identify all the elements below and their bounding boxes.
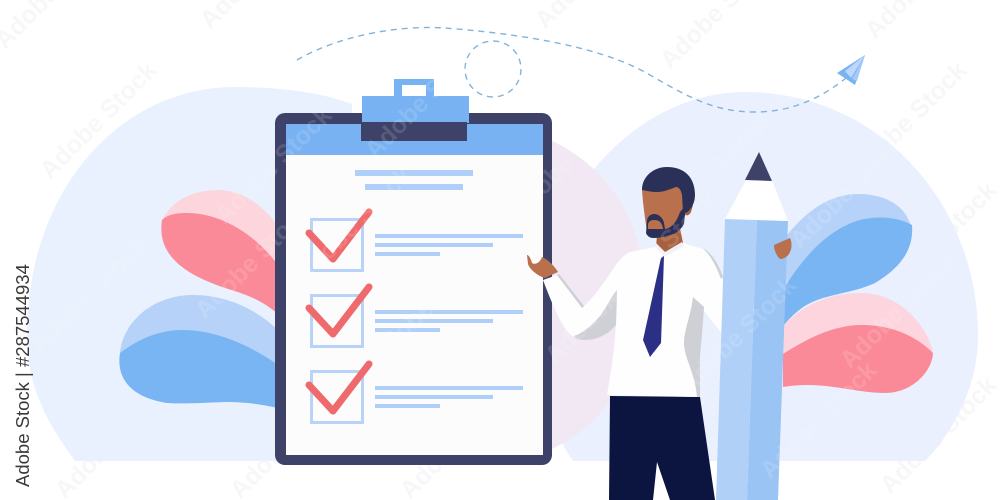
watermark over artwork: Adobe Stock xyxy=(289,161,417,289)
watermark on white background: Adobe Stock xyxy=(34,56,162,184)
checklist item 3 xyxy=(309,364,523,422)
pencil lead xyxy=(745,152,772,181)
pencil xyxy=(716,152,788,500)
plant: right blue leaf xyxy=(783,194,912,326)
watermark over artwork: Adobe Stock xyxy=(834,246,962,374)
watermark on white background: Adobe Stock xyxy=(4,221,132,349)
background shape: left pale blob xyxy=(27,87,352,461)
clip handle xyxy=(394,79,434,97)
watermark over artwork: Adobe Stock xyxy=(674,271,802,399)
dashed flight path xyxy=(297,27,846,112)
plant: right pink leaf xyxy=(783,293,933,393)
pencil body dark side xyxy=(747,220,788,500)
clipboard xyxy=(275,79,552,465)
right hand on pencil xyxy=(774,238,792,259)
watermark on white background: Adobe Stock xyxy=(844,56,972,184)
tie xyxy=(643,256,664,357)
beard and moustache xyxy=(646,205,686,238)
pencil wood tip xyxy=(725,180,788,221)
plant: left pink leaf xyxy=(161,190,278,314)
watermark over artwork: Adobe Stock xyxy=(704,51,832,179)
paper title lines xyxy=(355,170,473,190)
clipboard board xyxy=(275,113,552,465)
plant: left blue leaf xyxy=(119,295,278,408)
dashed loop xyxy=(465,41,521,97)
watermark over artwork: Adobe Stock xyxy=(359,36,487,164)
left hand xyxy=(527,255,558,278)
watermark over artwork: Adobe Stock xyxy=(44,46,172,174)
clip body xyxy=(362,96,469,123)
icon: paper plane xyxy=(837,55,865,85)
watermark over artwork: Adobe Stock xyxy=(24,231,152,359)
background shape: pink circle xyxy=(545,138,645,452)
watermark over artwork: Adobe Stock xyxy=(754,356,882,484)
stock id caption: Adobe Stock | #287544934 xyxy=(12,264,33,487)
man xyxy=(527,167,723,500)
mouth patch xyxy=(648,220,663,229)
watermark on white background: Adobe Stock xyxy=(874,176,1000,304)
clip base xyxy=(361,122,467,141)
watermark over artwork: Adobe Stock xyxy=(209,101,337,229)
watermark on white background: Adobe Stock xyxy=(874,371,1000,499)
watermark over artwork: Adobe Stock xyxy=(539,241,667,369)
pencil body light side xyxy=(716,219,757,500)
paper header band xyxy=(286,124,543,155)
background shape: right pale blob xyxy=(534,92,978,461)
hair xyxy=(642,167,695,213)
collar xyxy=(655,242,684,257)
watermark over artwork: Adobe Stock xyxy=(504,96,632,224)
shirt shadows xyxy=(557,248,723,397)
checklist item 2 xyxy=(309,287,523,346)
shirt xyxy=(543,243,723,397)
paper sheet xyxy=(286,124,543,455)
trousers xyxy=(609,396,715,500)
watermark over artwork: Adobe Stock xyxy=(594,186,722,314)
checklist item 1 xyxy=(309,212,523,270)
neck and ear xyxy=(656,205,693,256)
watermark over artwork: Adobe Stock xyxy=(189,196,317,324)
watermark over artwork: Adobe Stock xyxy=(784,126,912,254)
watermark over artwork: Adobe Stock xyxy=(364,241,492,369)
head face xyxy=(642,186,686,238)
